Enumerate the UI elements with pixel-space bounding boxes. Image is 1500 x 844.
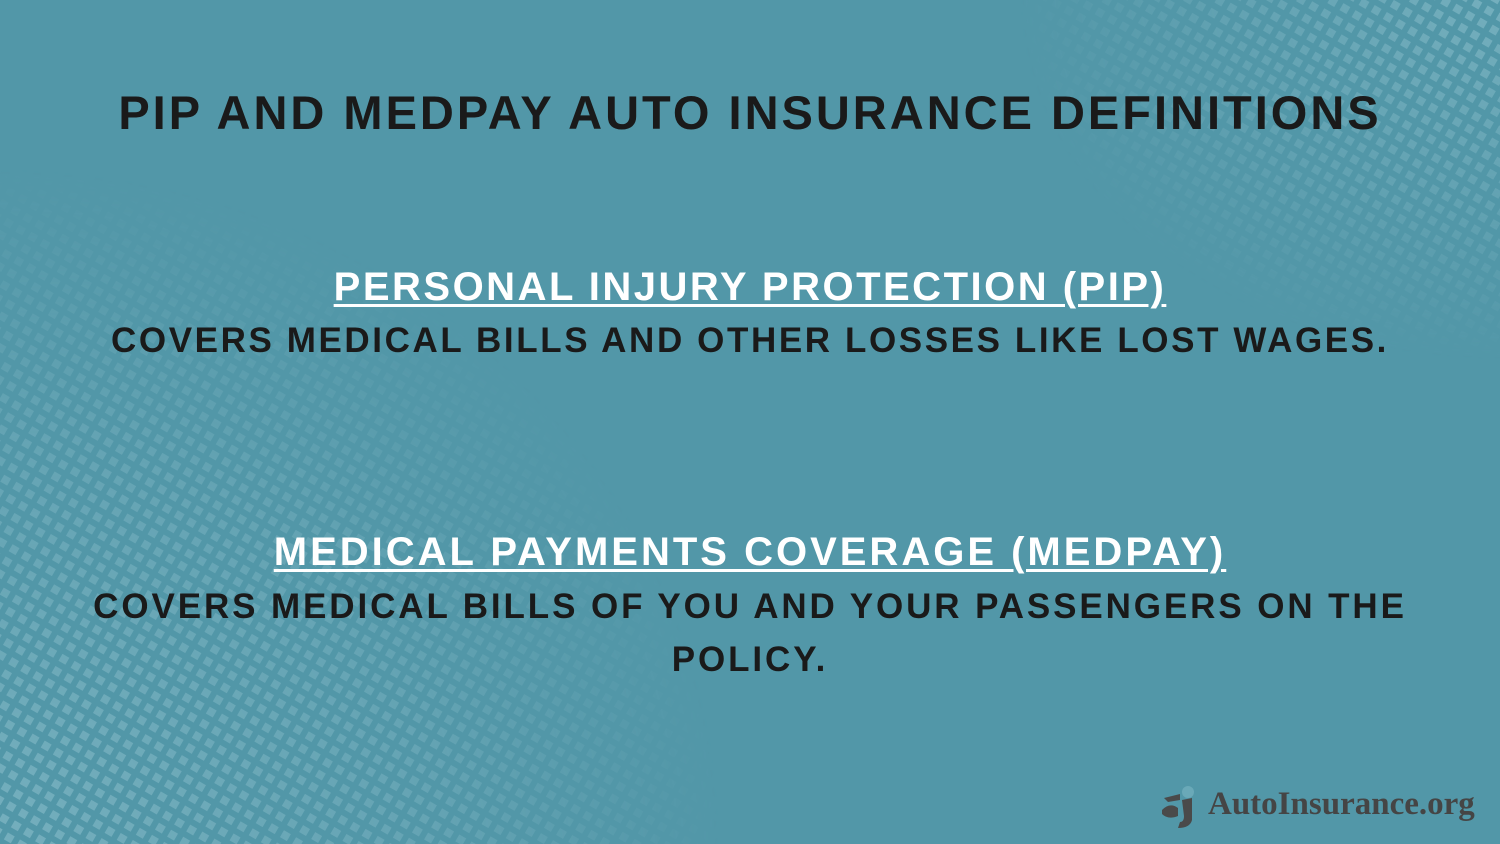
title: PIP AND MEDPAY AUTO INSURANCE DEFINITIONS [118,86,1382,139]
logo [1162,786,1475,828]
text: MedPay definition [93,587,1407,679]
icon: logo mark [1162,786,1194,828]
heading: MedPay: MEDICAL PAYMENTS COVERAGE (MEDPAY) [274,530,1226,574]
heading: PIP: PERSONAL INJURY PROTECTION (PIP) [334,265,1166,309]
text: PIP definition: COVERS MEDICAL BILLS AND OTHER LOSSES LIKE LOST WAGES. [111,321,1389,360]
text: MedPay definition: POLICY. [672,640,828,679]
logo text: AutoInsurance.org [1208,786,1475,822]
text: MedPay definition: COVERS MEDICAL BILLS OF YOU AND YOUR PASSENGERS ON THE [93,587,1407,626]
